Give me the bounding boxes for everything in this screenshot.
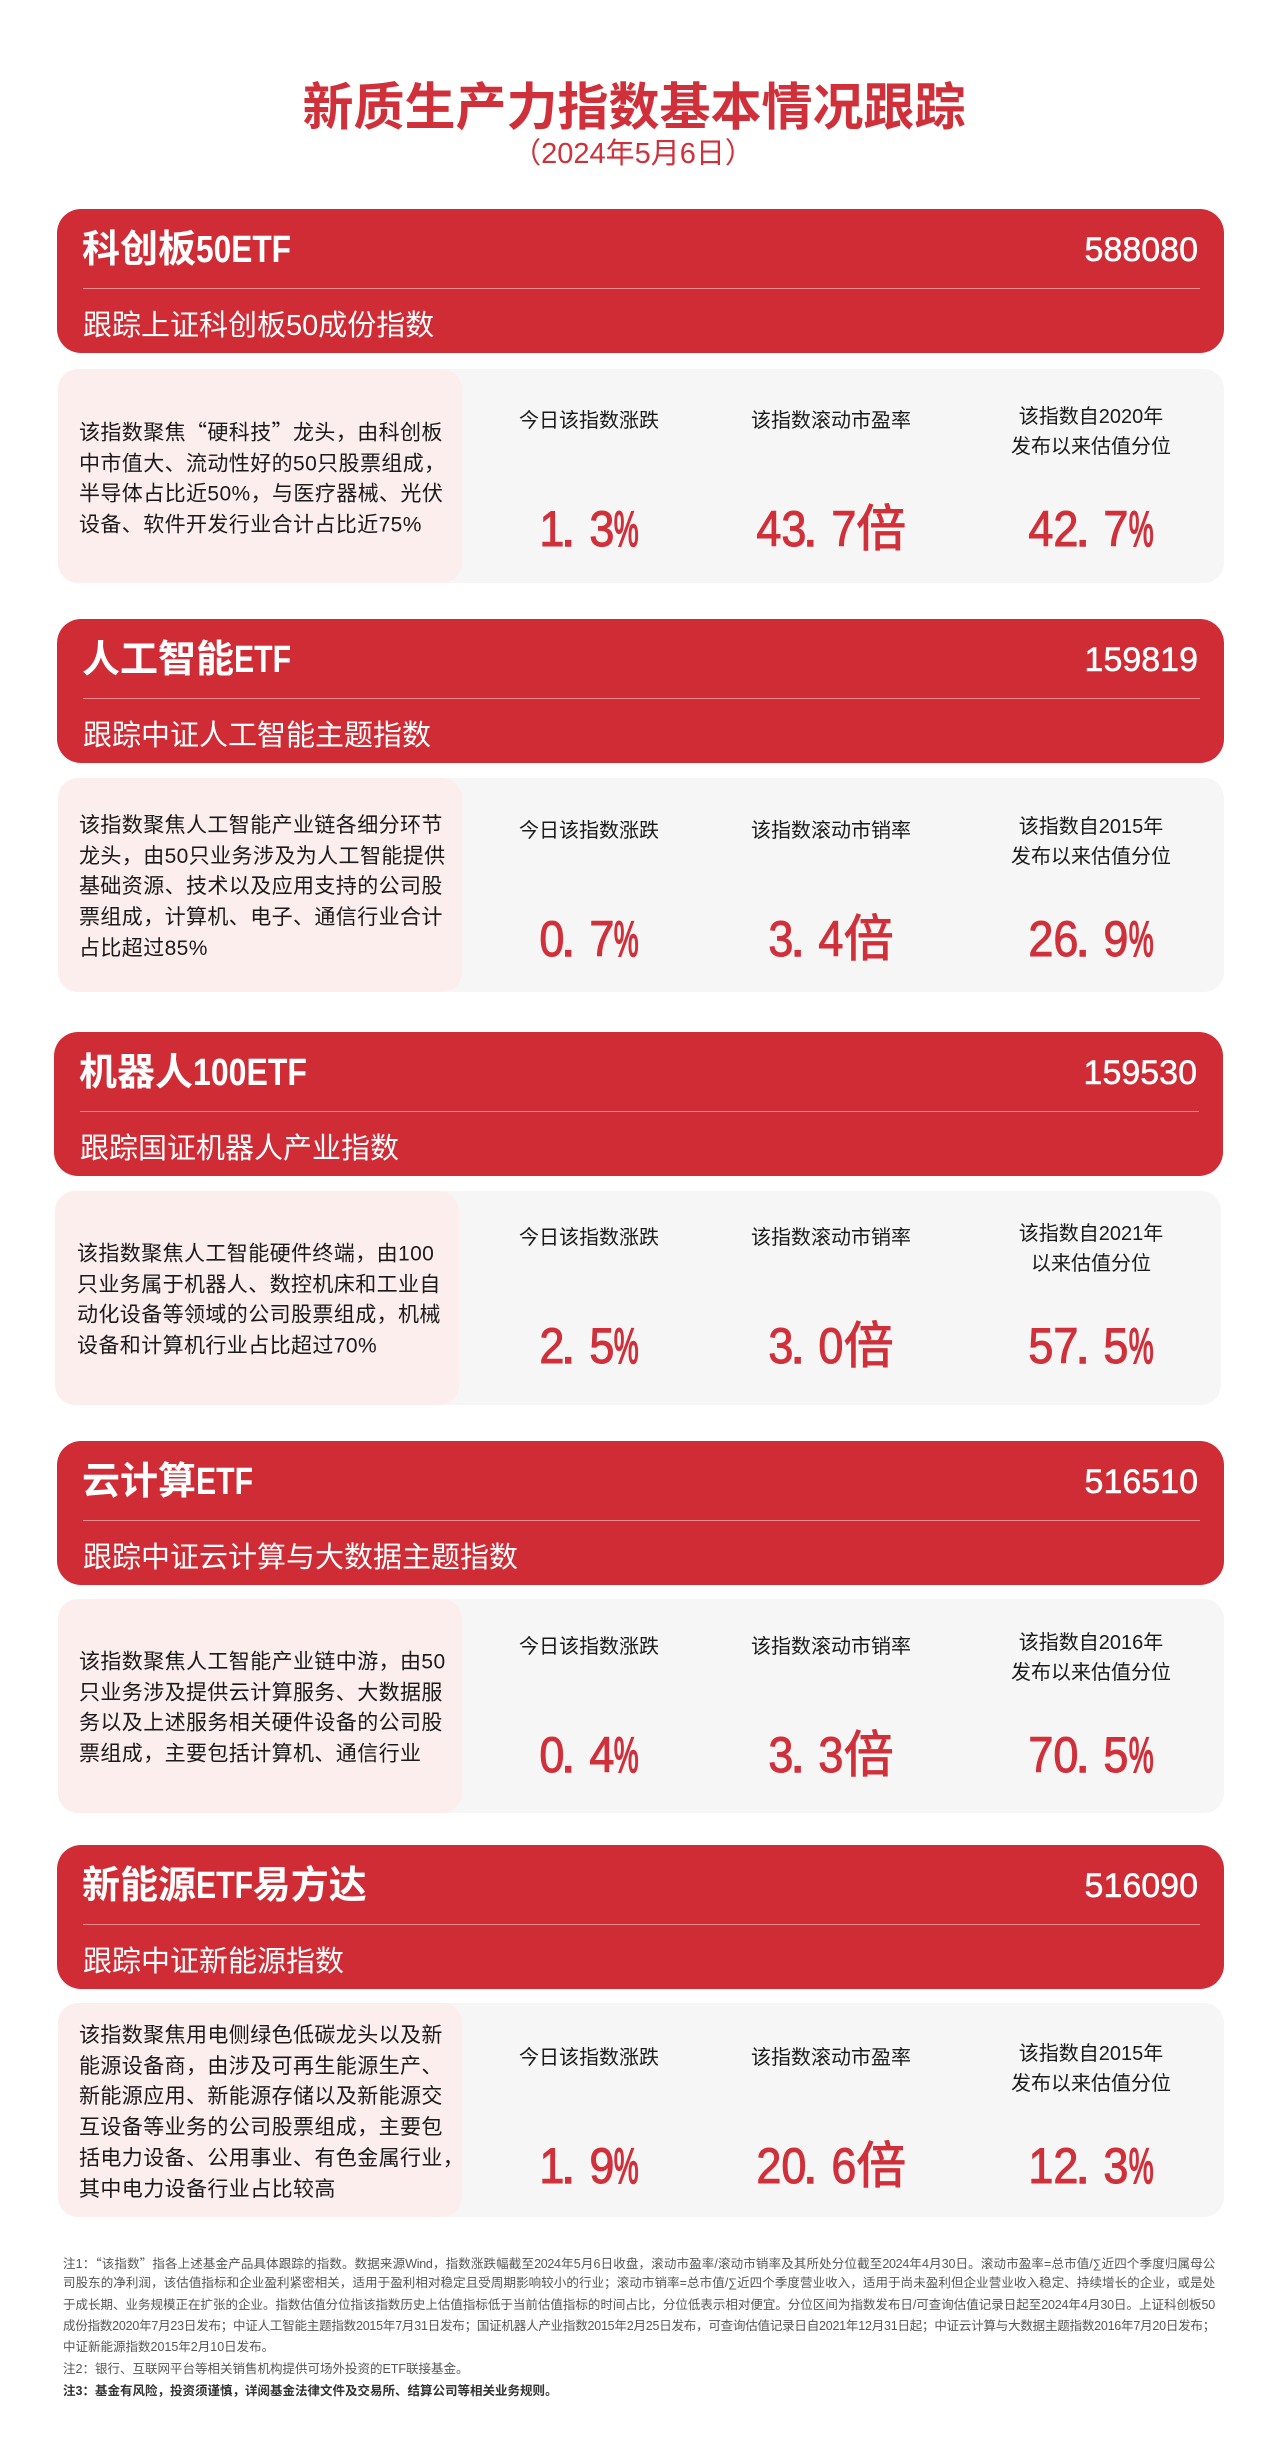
footnotes: 于成长期、业务规模正在扩张的企业。指数估值分位指该指数历史上估值指标低于当前估值指标的时间占比，分位低表示相对便宜。分位区间为指数发布日/可查询估值记录日起至2024年4月30日。上证科创板50: [63, 2298, 1215, 2312]
value: rolling PS: 3: [819, 1727, 844, 1783]
label: rolling PS: 该指数滚动市销率: [751, 1227, 911, 1249]
value: rolling PE: 倍: [856, 2138, 906, 2194]
index description: 动化设备等领域的公司股票组成，机械: [77, 1304, 441, 1327]
label: valuation percentile: 该指数自2015年: [1019, 2043, 1163, 2065]
fund name: 科创板: [82, 229, 196, 271]
tracked index: 跟踪上证科创板50成份指数: [83, 310, 434, 342]
value: daily change: 1: [539, 2138, 564, 2194]
index description: 该指数聚焦人工智能产业链各细分环节: [79, 814, 443, 837]
index description: 龙头，由50只业务涉及为人工智能提供: [79, 845, 446, 868]
panel: 人工智能ETF metrics: [58, 778, 1224, 992]
value: rolling PE: 7: [831, 501, 856, 557]
value: valuation percentile: %: [1129, 1727, 1154, 1783]
label: daily change: 今日该指数涨跌: [519, 820, 659, 842]
value: daily change: 9: [589, 2138, 614, 2194]
value: rolling PS: 0: [819, 1318, 844, 1374]
fund name: ETF: [196, 1461, 253, 1503]
label: rolling PE: 该指数滚动市盈率: [751, 2047, 911, 2069]
fund name: 人工智能: [82, 639, 234, 681]
label: valuation percentile: 发布以来估值分位: [1011, 1662, 1171, 1684]
value: daily change: 0: [539, 911, 564, 967]
value: rolling PE: 3: [781, 501, 806, 557]
fund name: 机器人: [79, 1052, 193, 1094]
index description: 只业务涉及提供云计算服务、大数据服: [79, 1681, 443, 1704]
value: rolling PS: 倍: [844, 1318, 894, 1374]
value: valuation percentile: 9: [1104, 911, 1129, 967]
value: daily change: [539, 911, 639, 967]
fund name: 云计算: [82, 1461, 196, 1503]
panel: 新能源ETF易方达 header: [57, 1845, 1224, 1989]
index description: 该指数聚焦人工智能产业链中游，由50: [79, 1651, 446, 1674]
value: valuation percentile: 2: [1053, 2138, 1078, 2194]
value: rolling PS: 3: [768, 1318, 793, 1374]
footnotes: 注3：基金有风险，投资须谨慎，详阅基金法律文件及交易所、结算公司等相关业务规则。: [63, 2384, 557, 2398]
value: valuation percentile: [1028, 2138, 1154, 2194]
value: rolling PS: 3: [768, 1727, 793, 1783]
index description: 新能源应用、新能源存储以及新能源交: [79, 2085, 443, 2108]
label: rolling PE: 该指数滚动市盈率: [751, 410, 911, 432]
value: valuation percentile: 3: [1104, 2138, 1129, 2194]
value: rolling PE: .: [803, 2138, 817, 2194]
label: valuation percentile: 该指数自2016年: [1019, 1632, 1163, 1654]
value: daily change: 0: [539, 1727, 564, 1783]
fund code: 588080: [1085, 231, 1198, 269]
value: daily change: %: [614, 2138, 639, 2194]
value: valuation percentile: [1028, 1727, 1154, 1783]
value: daily change: 4: [589, 1727, 614, 1783]
fund name: [82, 229, 291, 271]
value: daily change: 7: [589, 911, 614, 967]
footnotes: 中证新能源指数2015年2月10日发布。: [63, 2340, 274, 2354]
footnotes: [63, 2253, 1215, 2398]
index description: [58, 1599, 462, 1813]
value: valuation percentile: 2: [1028, 911, 1053, 967]
value: rolling PE: 0: [781, 2138, 806, 2194]
value: valuation percentile: %: [1129, 501, 1154, 557]
index description: 中市值大、流动性好的50只股票组成，: [79, 452, 446, 475]
value: rolling PS: .: [791, 1727, 805, 1783]
label: valuation percentile: 以来估值分位: [1031, 1253, 1151, 1275]
value: rolling PS: .: [791, 911, 805, 967]
label: valuation percentile: 发布以来估值分位: [1011, 436, 1171, 458]
index description: 互设备等业务的公司股票组成，主要包: [79, 2116, 443, 2139]
index description: 该指数聚焦“硬科技”龙头，由科创板: [79, 417, 443, 447]
index description: 半导体占比近50%，与医疗器械、光伏: [79, 483, 443, 506]
fund name: 50ETF: [196, 229, 291, 271]
fund code: 516090: [1085, 1867, 1198, 1905]
label: rolling PS: 该指数滚动市销率: [751, 1636, 911, 1658]
value: valuation percentile: 1: [1028, 2138, 1053, 2194]
value: valuation percentile: 4: [1028, 501, 1053, 557]
footnotes: 成份指数2020年7月23日发布；中证人工智能主题指数2015年7月31日发布；国证机器人产业指数2015年2月25日发布，可查询估值记录日自2021年12月31日起；中证云计算与大数据主题指数2016年7月20日发布；: [63, 2319, 1215, 2333]
footnotes: 注2：银行、互联网平台等相关销售机构提供可场外投资的ETF联接基金。: [63, 2362, 469, 2376]
value: valuation percentile: .: [1076, 911, 1090, 967]
label: valuation percentile: [1011, 2043, 1171, 2095]
label: rolling PS: 该指数滚动市销率: [751, 820, 911, 842]
tracked index: 跟踪中证新能源指数: [83, 1946, 344, 1978]
footnotes: 司股东的净利润，该估值指标和企业盈利紧密相关，适用于盈利相对稳定且受周期影响较小的行业；滚动市销率=总市值/∑近四个季度营业收入，适用于尚未盈利但企业营业收入稳定、持续增长的企业，或是处: [63, 2276, 1215, 2290]
label: valuation percentile: [1011, 1632, 1171, 1684]
value: daily change: %: [614, 1727, 639, 1783]
value: valuation percentile: .: [1076, 1318, 1090, 1374]
value: valuation percentile: 0: [1053, 1727, 1078, 1783]
index description: 基础资源、技术以及应用支持的公司股: [79, 876, 443, 899]
value: rolling PS: [768, 1318, 894, 1374]
value: daily change: %: [614, 501, 639, 557]
value: rolling PE: 倍: [856, 501, 906, 557]
label: valuation percentile: 该指数自2015年: [1019, 816, 1163, 838]
value: daily change: 1: [539, 501, 564, 557]
index description: [58, 778, 462, 992]
index description: 该指数聚焦人工智能硬件终端，由100: [77, 1243, 434, 1266]
fund name: 新能源 易方达: [82, 1865, 367, 1907]
value: daily change: .: [561, 2138, 575, 2194]
value: valuation percentile: %: [1129, 1318, 1154, 1374]
panel: 人工智能ETF header: [57, 619, 1224, 763]
value: rolling PS: [768, 1727, 894, 1783]
index description: 务以及上述服务相关硬件设备的公司股: [79, 1712, 443, 1735]
value: valuation percentile: 7: [1053, 1318, 1078, 1374]
index description: 设备和计算机行业占比超过70%: [77, 1335, 377, 1358]
value: daily change: [539, 1727, 639, 1783]
index description: 能源设备商，由涉及可再生能源生产、: [79, 2055, 443, 2078]
panel: 科创板50ETF metrics: [58, 369, 1224, 583]
value: valuation percentile: .: [1076, 501, 1090, 557]
value: rolling PE: [756, 2138, 906, 2194]
panel: 新能源ETF易方达 metrics: [58, 2003, 1224, 2217]
value: rolling PE: 6: [831, 2138, 856, 2194]
footnotes: 注1：“该指数”指各上述基金产品具体跟踪的指数。数据来源Wind，指数涨跌幅截至2024年5月6日收盘，滚动市盈率/滚动市销率及其所处分位截至2024年4月30日。滚动市盈率=总市值/∑近四个季度归属母公: [63, 2253, 1215, 2272]
index description: [55, 1191, 459, 1405]
value: rolling PS: 倍: [844, 1727, 894, 1783]
value: valuation percentile: .: [1076, 2138, 1090, 2194]
label: daily change: 今日该指数涨跌: [519, 410, 659, 432]
value: rolling PE: [756, 501, 906, 557]
value: valuation percentile: 6: [1053, 911, 1078, 967]
value: rolling PE: 4: [756, 501, 781, 557]
value: valuation percentile: [1028, 501, 1154, 557]
panel: 机器人100ETF header: [54, 1032, 1223, 1176]
index description: [58, 369, 462, 583]
value: daily change: .: [561, 501, 575, 557]
fund name: [79, 1052, 307, 1094]
value: daily change: %: [614, 1318, 639, 1374]
value: valuation percentile: %: [1129, 2138, 1154, 2194]
label: valuation percentile: [1011, 816, 1171, 868]
value: daily change: .: [561, 1727, 575, 1783]
value: valuation percentile: [1028, 1318, 1154, 1374]
title: 新质生产力指数基本情况跟踪: [302, 79, 966, 136]
value: daily change: [539, 2138, 639, 2194]
index description: 该指数聚焦用电侧绿色低碳龙头以及新: [79, 2024, 443, 2047]
label: valuation percentile: 发布以来估值分位: [1011, 2073, 1171, 2095]
value: daily change: 2: [539, 1318, 564, 1374]
fund name: ETF: [196, 1865, 253, 1907]
label: valuation percentile: 发布以来估值分位: [1011, 846, 1171, 868]
value: daily change: %: [614, 911, 639, 967]
label: valuation percentile: 该指数自2020年: [1019, 406, 1163, 428]
value: valuation percentile: .: [1076, 1727, 1090, 1783]
index description: [58, 2003, 462, 2217]
panel: 云计算ETF header: [57, 1441, 1224, 1585]
label: valuation percentile: [1011, 406, 1171, 458]
value: rolling PE: 2: [756, 2138, 781, 2194]
index description: 占比超过85%: [79, 937, 208, 960]
value: valuation percentile: 7: [1028, 1727, 1053, 1783]
index description: 其中电力设备行业占比较高: [79, 2177, 336, 2200]
value: valuation percentile: 5: [1104, 1318, 1129, 1374]
fund name: 100ETF: [193, 1052, 307, 1094]
value: daily change: 5: [589, 1318, 614, 1374]
tracked index: 跟踪国证机器人产业指数: [80, 1133, 399, 1165]
index description: 设备、软件开发行业合计占比近75%: [79, 514, 422, 537]
value: rolling PE: .: [803, 501, 817, 557]
label: daily change: 今日该指数涨跌: [519, 1636, 659, 1658]
tracked index: 跟踪中证人工智能主题指数: [83, 720, 431, 752]
value: valuation percentile: 7: [1104, 501, 1129, 557]
index description: 括电力设备、公用事业、有色金属行业，: [79, 2147, 464, 2170]
value: daily change: [539, 501, 639, 557]
value: daily change: [539, 1318, 639, 1374]
label: valuation percentile: 该指数自2021年: [1019, 1223, 1163, 1245]
fund name: ETF: [234, 639, 291, 681]
index description: 票组成，计算机、电子、通信行业合计: [79, 906, 443, 929]
label: daily change: 今日该指数涨跌: [519, 2047, 659, 2069]
value: valuation percentile: %: [1129, 911, 1154, 967]
fund code: 159819: [1085, 641, 1198, 679]
tracked index: 跟踪中证云计算与大数据主题指数: [83, 1542, 518, 1574]
panel: 机器人100ETF metrics: [55, 1191, 1221, 1405]
label: valuation percentile: [1019, 1223, 1163, 1275]
value: daily change: 3: [589, 501, 614, 557]
fund code: 159530: [1084, 1054, 1197, 1092]
panel: 科创板50ETF header: [57, 209, 1224, 353]
value: daily change: .: [561, 911, 575, 967]
value: valuation percentile: 5: [1028, 1318, 1053, 1374]
value: rolling PS: [768, 911, 894, 967]
value: daily change: .: [561, 1318, 575, 1374]
value: valuation percentile: [1028, 911, 1154, 967]
fund code: 516510: [1085, 1463, 1198, 1501]
value: rolling PS: 4: [819, 911, 844, 967]
value: rolling PS: .: [791, 1318, 805, 1374]
index description: 只业务属于机器人、数控机床和工业自: [77, 1273, 441, 1296]
value: rolling PS: 倍: [844, 911, 894, 967]
fund name: [82, 1461, 253, 1503]
label: daily change: 今日该指数涨跌: [519, 1227, 659, 1249]
value: valuation percentile: 2: [1053, 501, 1078, 557]
value: rolling PS: 3: [768, 911, 793, 967]
subtitle: date: （2024年5月6日）: [512, 138, 754, 170]
panel: 云计算ETF metrics: [58, 1599, 1224, 1813]
value: valuation percentile: 5: [1104, 1727, 1129, 1783]
index description: 票组成，主要包括计算机、通信行业: [79, 1743, 421, 1766]
